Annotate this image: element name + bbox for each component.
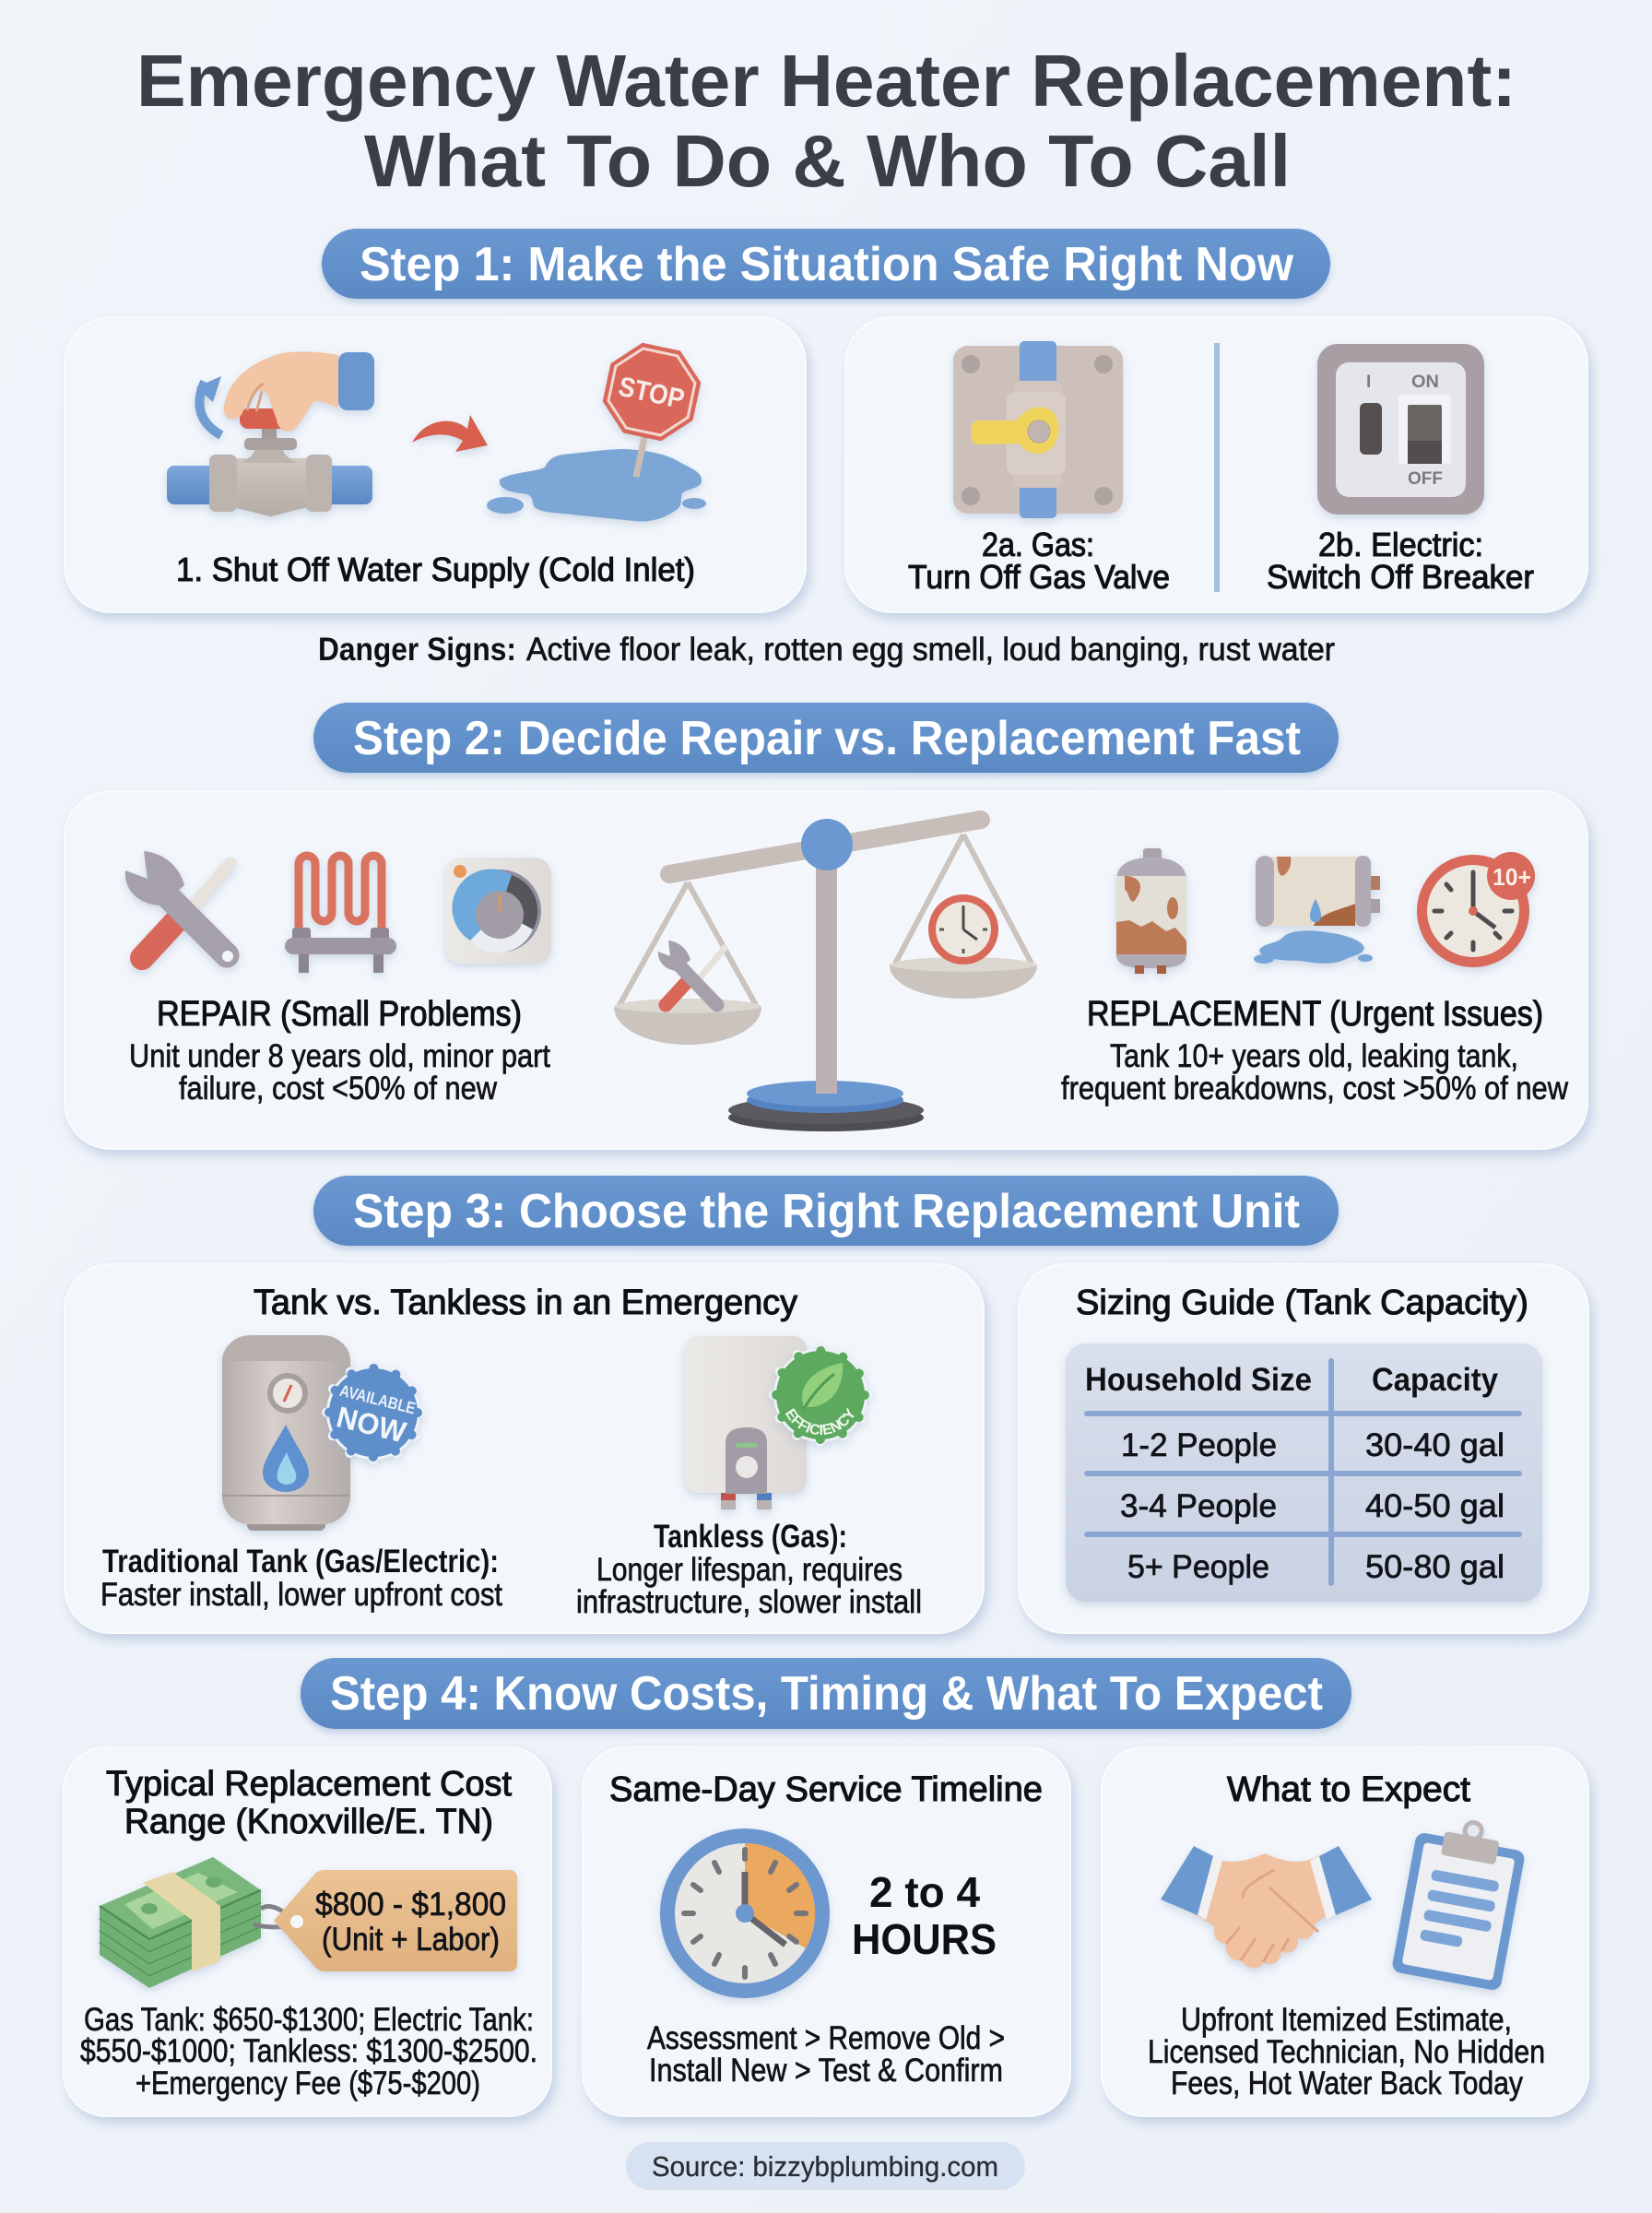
panel: what to expect <box>1102 1747 1588 2116</box>
text: traditional tank <box>100 1544 502 1613</box>
icon: efficiency badge <box>769 1346 874 1452</box>
title: Emergency Water Heater Replacement: <box>136 40 1516 122</box>
table: household size and capacity: 50-80 gal <box>1365 1549 1504 1585</box>
text: gas label: 2a. Gas: <box>982 526 1094 563</box>
icon: available now badge: NOW <box>334 1400 410 1450</box>
text: cost breakdown: Gas Tank: $650-$1300; Electric Tank: <box>84 2002 534 2038</box>
heading: step 3: Step 3: Choose the Right Replacement Unit <box>353 1185 1300 1238</box>
heading: what to expect: What to Expect <box>1227 1770 1470 1809</box>
title: What To Do & Who To Call <box>364 120 1291 202</box>
text: electric label <box>1267 526 1534 596</box>
icon: old clock with 10+ badge: 10+ <box>1493 863 1531 891</box>
text: danger signs: Danger Signs: <box>318 632 516 668</box>
icon: electric breaker: I <box>1366 373 1371 392</box>
icon: traditional tank <box>222 1335 350 1531</box>
arrow: valve to leak <box>412 415 488 452</box>
icon: available now badge: AVAILABLE <box>337 1381 418 1418</box>
icon: clipboard <box>1391 1813 1529 1992</box>
panel: repair vs replacement <box>65 791 1587 1149</box>
table: household size and capacity: 40-50 gal <box>1365 1488 1504 1524</box>
table: household size and capacity: 3-4 People <box>1120 1488 1277 1524</box>
text: 2 to 4 hours: HOURS <box>852 1915 997 1963</box>
heading: typical replacement cost: Typical Replacement Cost <box>106 1765 512 1804</box>
text: replacement heading and description: frequent breakdowns, cost >50% of new <box>1061 1071 1569 1106</box>
text: traditional tank: Faster install, lower upfront cost <box>100 1577 502 1613</box>
heading: step 4: Step 4: Know Costs, Timing & What To Expect <box>330 1667 1323 1721</box>
icon: thermostat <box>445 858 551 964</box>
icon: small clock on right pan <box>928 894 998 964</box>
panel: same-day timeline <box>583 1747 1070 2116</box>
text: gas label <box>908 526 1170 596</box>
icon: electric breaker <box>1317 344 1484 515</box>
icon: 2 to 4 hour clock <box>660 1828 830 1998</box>
icon: price tag: (Unit + Labor) <box>322 1922 500 1958</box>
text: 2 to 4 hours: 2 to 4 <box>869 1868 980 1916</box>
icon: tankless unit <box>685 1336 807 1509</box>
text: electric label: 2b. Electric: <box>1318 526 1483 563</box>
text: replacement heading and description: REPLACEMENT (Urgent Issues) <box>1087 995 1543 1034</box>
icon: price tag <box>254 1870 517 1971</box>
heading: typical replacement cost: Range (Knoxville/E. TN) <box>124 1803 493 1841</box>
text: electric label: Switch Off Breaker <box>1267 558 1534 596</box>
text: what to expect list <box>1148 2002 1545 2101</box>
text: tankless <box>576 1519 922 1620</box>
text: tankless: infrastructure, slower install <box>576 1584 922 1620</box>
text: repair heading and description: failure, cost <50% of new <box>179 1071 498 1106</box>
text: gas label: Turn Off Gas Valve <box>908 558 1170 596</box>
source pill <box>626 2142 1025 2190</box>
icon: balance scale <box>614 819 1037 1131</box>
icon: handshake <box>1161 1846 1372 1969</box>
table: household size and capacity: Capacity <box>1372 1362 1498 1398</box>
panel: sizing guide <box>1019 1264 1588 1633</box>
table: household size and capacity: 1-2 People <box>1121 1427 1277 1463</box>
panel: replacement cost <box>64 1747 551 2116</box>
heading: typical replacement cost <box>106 1765 512 1841</box>
text: repair heading and description <box>129 995 550 1106</box>
table: household size and capacity <box>1066 1343 1542 1602</box>
title <box>136 40 1516 202</box>
icon: price tag: $800 - $1,800 <box>315 1887 506 1923</box>
text: timeline steps: Assessment > Remove Old > <box>647 2020 1005 2056</box>
text: repair heading and description: REPAIR (Small Problems) <box>157 995 522 1034</box>
source pill: Source: bizzybplumbing.com <box>652 2150 998 2183</box>
table: household size and capacity: 30-40 gal <box>1365 1427 1504 1463</box>
heading: tank vs tankless: Tank vs. Tankless in an Emergency <box>254 1284 797 1322</box>
icon: wrench and screwdriver <box>125 851 233 962</box>
icon: small tools on left pan <box>658 941 725 1005</box>
icon: stop sign in puddle: STOP <box>616 372 687 415</box>
icon: electric breaker: ON <box>1411 373 1439 392</box>
text: repair heading and description: Unit under 8 years old, minor part <box>129 1038 550 1074</box>
table: household size and capacity: Household Size <box>1085 1362 1312 1398</box>
icon: efficiency badge: EFFICIENCY <box>785 1407 854 1435</box>
text: tankless: Tankless (Gas): <box>654 1519 847 1555</box>
icon: electric breaker: OFF <box>1408 469 1443 489</box>
heading: sizing guide: Sizing Guide (Tank Capacity) <box>1076 1284 1528 1322</box>
text: cost breakdown <box>80 2002 537 2101</box>
icon: rusty tank <box>1116 848 1186 974</box>
icon: cash stack <box>100 1857 261 1988</box>
heading: same-day service timeline: Same-Day Service Timeline <box>609 1770 1043 1809</box>
icon: old clock with 10+ badge <box>1417 852 1535 967</box>
text: danger signs: Active floor leak, rotten egg smell, loud banging, rust water <box>526 632 1335 668</box>
icon: stop sign in puddle <box>487 337 706 521</box>
text: timeline steps: Install New > Test & Confirm <box>649 2053 1003 2089</box>
panel: shut off water <box>65 317 806 612</box>
text: what to expect list: Upfront Itemized Estimate, <box>1181 2002 1512 2038</box>
heading: step 2: Step 2: Decide Repair vs. Replacement Fast <box>353 712 1301 765</box>
text: replacement heading and description: Tank 10+ years old, leaking tank, <box>1110 1038 1518 1074</box>
icon: gas valve <box>953 341 1123 518</box>
icon: available now badge <box>326 1366 420 1460</box>
panel: tank vs tankless <box>63 1263 993 1645</box>
text: step 1 label: 1. Shut Off Water Supply (Cold Inlet) <box>176 550 695 588</box>
heading: step 1: Step 1: Make the Situation Safe Right Now <box>360 238 1294 291</box>
icon: leaking horizontal tank <box>1254 856 1380 964</box>
text: timeline steps <box>647 2020 1005 2089</box>
text: what to expect list: Licensed Technician, No Hidden <box>1148 2034 1545 2070</box>
panel: gas and electric shutoff <box>845 317 1587 612</box>
text: what to expect list: Fees, Hot Water Back Today <box>1171 2065 1523 2101</box>
icon: heating element <box>285 856 396 973</box>
text: 2 to 4 hours <box>852 1868 997 1963</box>
text: cost breakdown: +Emergency Fee ($75-$200) <box>136 2065 480 2101</box>
table: household size and capacity: 5+ People <box>1127 1549 1269 1585</box>
text: cost breakdown: $550-$1000; Tankless: $1300-$2500. <box>80 2033 537 2069</box>
text: traditional tank: Traditional Tank (Gas/Electric): <box>102 1544 499 1580</box>
text: replacement heading and description <box>1061 995 1569 1106</box>
icon: hand turning water valve <box>167 351 374 516</box>
text: tankless: Longer lifespan, requires <box>596 1552 903 1588</box>
